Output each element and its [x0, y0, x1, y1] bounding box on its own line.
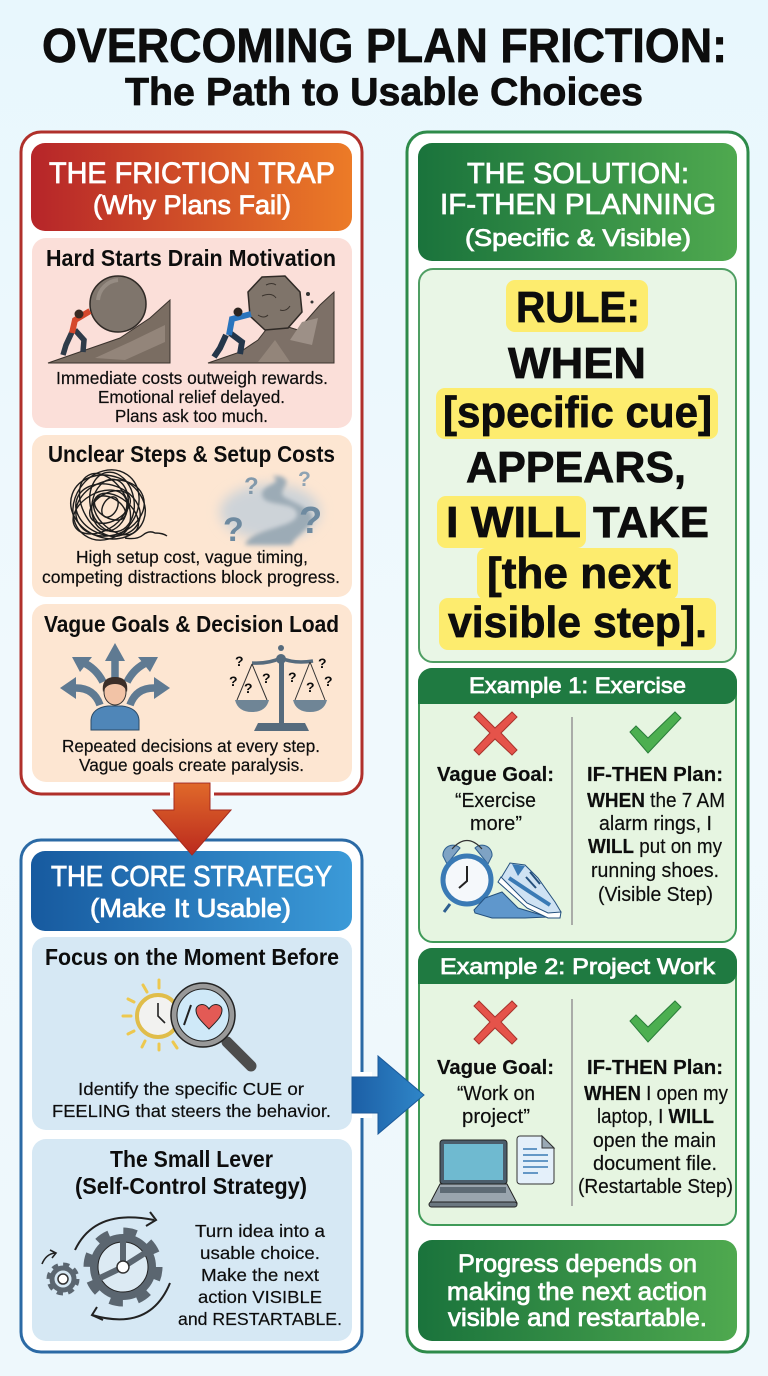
rule box: TAKE: [593, 498, 709, 547]
title: OVERCOMING PLAN FRICTION:: [42, 20, 727, 73]
card: hard starts: Emotional relief delayed.: [98, 387, 285, 407]
card: vague goals: [32, 604, 352, 782]
friction trap header: THE FRICTION TRAP: [49, 157, 335, 190]
card: vague goals: Vague goals create paralysis.: [79, 755, 304, 775]
example 1: exercise: Example 1: Exercise: [469, 673, 686, 698]
icon: foggy winding road with question marks: ?: [298, 468, 311, 491]
icon: gears with rotating arrows: [42, 1212, 170, 1320]
rule box: visible step].: [448, 598, 707, 647]
icon: alarm clock: [443, 840, 492, 912]
icon: scales with question marks: ?: [318, 655, 327, 671]
footer callout: visible and restartable.: [448, 1304, 707, 1332]
if-then plan text: IF-THEN Plan:: [587, 1056, 723, 1079]
icon: foggy winding road with question marks: [220, 468, 322, 549]
panel: the friction trap: [21, 132, 362, 794]
solution header: (Specific & Visible): [465, 225, 691, 252]
card: vague goals: Repeated decisions at every step.: [62, 736, 320, 756]
icon: tangled scribble: [59, 457, 167, 553]
icon: person pushing rough boulder up rocky hill: [208, 276, 334, 363]
card: focus on the moment before: [32, 937, 352, 1130]
example 2: project work: Example 2: Project Work: [440, 954, 716, 979]
friction trap header: (Why Plans Fail): [93, 190, 291, 220]
icon: foggy winding road with question marks: ?: [223, 511, 244, 549]
if-then plan text: (Restartable Step): [578, 1175, 733, 1198]
icon: green check: [630, 712, 681, 753]
title: The Path to Usable Choices: [125, 71, 643, 114]
card: hard starts: Plans ask too much.: [115, 406, 268, 426]
core strategy header: [31, 851, 352, 931]
example 2: project work: [418, 948, 737, 1225]
title: [42, 20, 727, 114]
rule box: [specific cue]: [443, 388, 712, 437]
card: unclear steps: Unclear Steps & Setup Costs: [48, 441, 335, 467]
card: hard starts: Immediate costs outweigh rewards.: [56, 368, 328, 388]
icon: scales with question marks: [229, 645, 333, 731]
footer callout: [418, 1240, 737, 1341]
footer callout: Progress depends on: [458, 1250, 697, 1278]
rule box: [the next: [487, 549, 671, 598]
rule box: WHEN: [508, 339, 646, 388]
vague goal text: [437, 1056, 554, 1128]
card: the small lever: Turn idea into a: [195, 1221, 325, 1241]
icon: scales with question marks: ?: [229, 673, 238, 689]
icon: green check: [630, 1001, 681, 1042]
card: hard starts: Hard Starts Drain Motivation: [46, 245, 336, 271]
icon: person pushing round boulder up smooth slope: [48, 276, 170, 363]
vague goal text: “Exercise: [455, 789, 536, 812]
rule box: I WILL: [446, 498, 581, 547]
icon: red cross: [474, 1001, 517, 1044]
vague goal text: [437, 763, 554, 835]
if-then plan text: [587, 763, 725, 906]
card: the small lever: usable choice.: [200, 1243, 320, 1263]
if-then plan text: [578, 1056, 733, 1198]
if-then plan text: open the main: [593, 1129, 716, 1152]
card: the small lever: and RESTARTABLE.: [178, 1309, 342, 1329]
icon: scales with question marks: ?: [288, 669, 297, 685]
footer callout: making the next action: [447, 1278, 707, 1306]
arrow: blue right arrow: [352, 1056, 424, 1134]
card: focus on the moment before: Focus on the Moment Before: [45, 944, 339, 970]
icon: scales with question marks: ?: [244, 680, 253, 696]
icon: clock and magnifying glass: [123, 980, 251, 1066]
if-then plan text: WHEN I open my: [584, 1082, 729, 1105]
solution header: [418, 143, 737, 261]
core strategy header: THE CORE STRATEGY: [51, 861, 332, 893]
card: focus on the moment before: Identify the specific CUE or: [78, 1079, 304, 1099]
icon: laptop: [429, 1140, 517, 1207]
card: focus on the moment before: FEELING that steers the behavior.: [52, 1101, 331, 1121]
if-then plan text: (Visible Step): [598, 883, 713, 906]
core strategy header: (Make It Usable): [90, 893, 291, 923]
icon: scales with question marks: ?: [235, 653, 244, 669]
if-then plan text: WHEN the 7 AM: [587, 789, 725, 812]
if-then plan text: alarm rings, I: [599, 812, 712, 835]
icon: red cross: [474, 712, 517, 755]
if-then plan text: running shoes.: [591, 859, 719, 882]
card: vague goals: Vague Goals & Decision Load: [44, 611, 339, 637]
if-then plan text: WILL put on my: [588, 835, 723, 858]
card: hard starts: [32, 238, 352, 428]
vague goal text: project”: [462, 1105, 530, 1128]
icon: foggy winding road with question marks: ?: [244, 473, 259, 500]
vague goal text: “Work on: [457, 1082, 535, 1105]
rule box: [419, 269, 736, 662]
vague goal text: Vague Goal:: [437, 763, 554, 786]
rule box: RULE:: [516, 283, 640, 332]
if-then plan text: IF-THEN Plan:: [587, 763, 723, 786]
card: unclear steps: competing distractions block progress.: [42, 567, 340, 587]
card: unclear steps: [32, 435, 352, 597]
solution header: IF-THEN PLANNING: [440, 189, 716, 221]
card: the small lever: action VISIBLE: [198, 1287, 322, 1307]
rule box: APPEARS,: [466, 443, 686, 492]
icon: foggy winding road with question marks: ?: [299, 500, 322, 542]
icon: scales with question marks: ?: [306, 679, 315, 695]
icon: scales with question marks: ?: [324, 673, 333, 689]
vague goal text: Vague Goal:: [437, 1056, 554, 1079]
card: the small lever: The Small Lever: [110, 1146, 273, 1172]
icon: scales with question marks: ?: [262, 670, 271, 686]
panel: the solution: [407, 132, 748, 1352]
icon: document: [517, 1136, 554, 1184]
icon: person with diverging arrows: [60, 643, 170, 730]
vague goal text: more”: [470, 812, 522, 835]
card: unclear steps: High setup cost, vague timing,: [76, 547, 308, 567]
solution header: THE SOLUTION:: [467, 158, 689, 190]
arrow: red down arrow: [153, 783, 231, 855]
icon: running shoes: [474, 863, 561, 918]
friction trap header: [31, 143, 352, 231]
card: the small lever: (Self-Control Strategy): [75, 1173, 307, 1199]
example 1: exercise: [418, 668, 737, 942]
card: the small lever: [32, 1139, 352, 1341]
if-then plan text: laptop, I WILL: [597, 1105, 714, 1128]
card: the small lever: Make the next: [201, 1265, 319, 1285]
panel: the core strategy: [21, 840, 362, 1352]
if-then plan text: document file.: [593, 1152, 717, 1175]
